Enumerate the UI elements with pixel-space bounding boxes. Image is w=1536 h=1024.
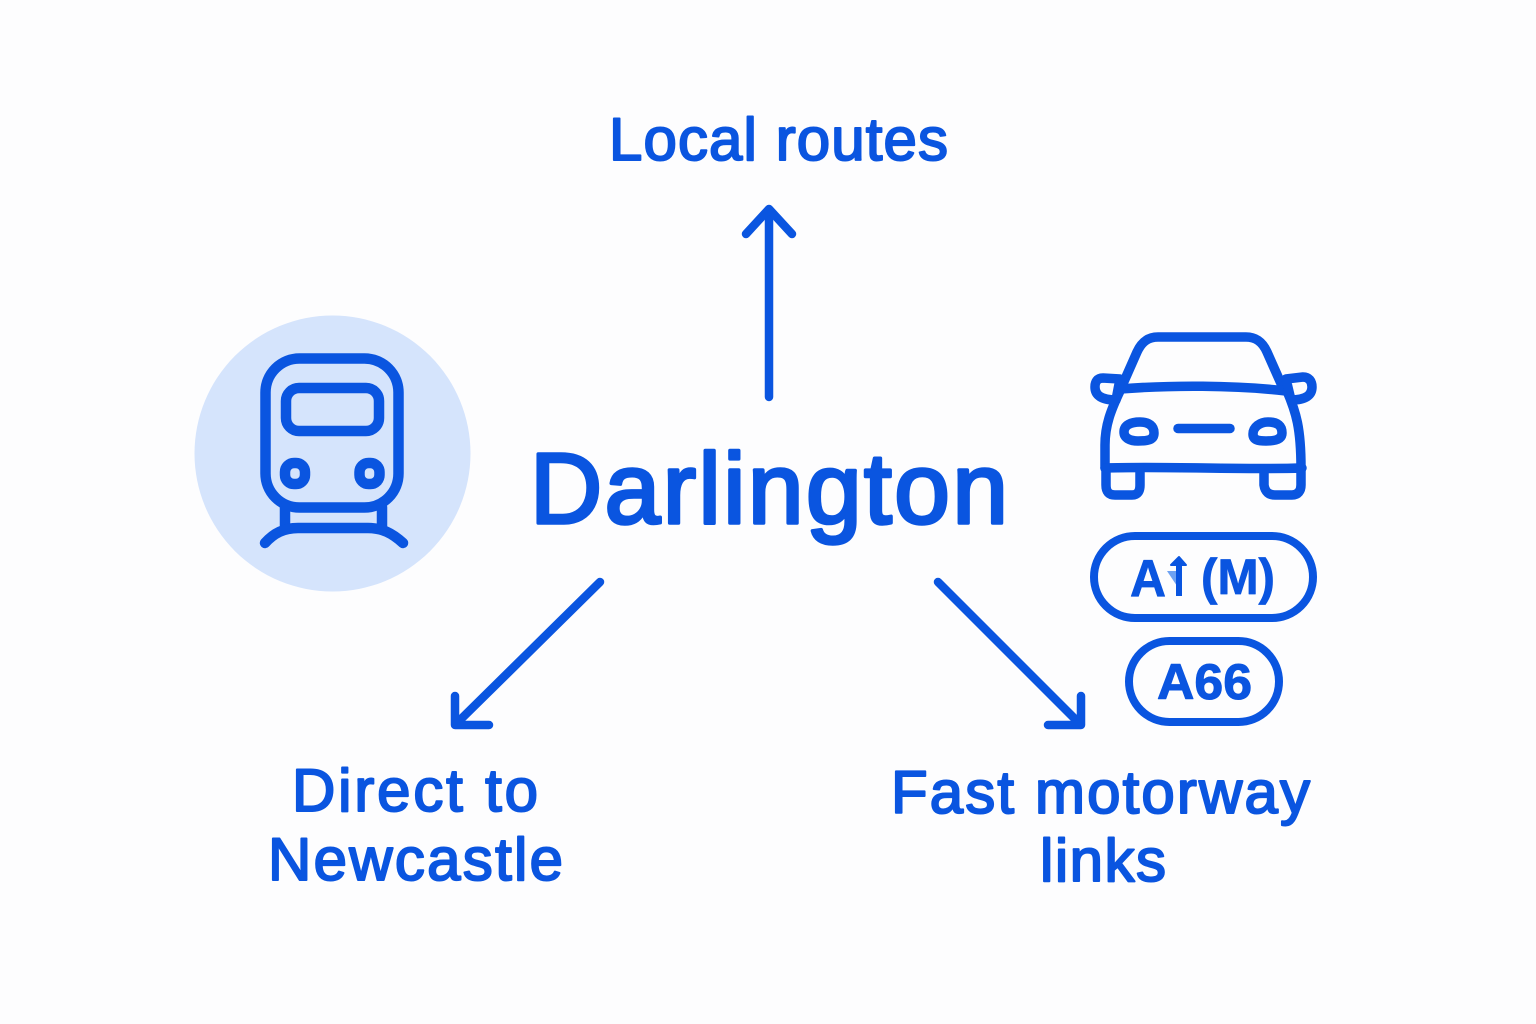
label: Direct to Newcastle: Direct to — [292, 757, 538, 824]
icon: car — [1095, 337, 1312, 495]
arrow: to motorway links — [938, 582, 1081, 725]
icon: train in circle — [194, 316, 470, 592]
label: Fast motorway links — [891, 759, 1310, 894]
label: Direct to Newcastle: Newcastle — [268, 826, 563, 893]
badge: A1(M) — [1094, 536, 1313, 618]
badge: A66: A66 — [1157, 654, 1252, 710]
heading: Local routes: Local routes — [609, 106, 948, 173]
arrow: up to local routes — [746, 209, 792, 397]
title: Darlington: Darlington — [530, 433, 1008, 545]
label: Fast motorway links: Fast motorway — [891, 759, 1310, 826]
badge: A1(M): (M) — [1201, 549, 1275, 605]
label: Fast motorway links: links — [1040, 827, 1166, 894]
label: Direct to Newcastle — [268, 757, 563, 893]
arrow: to Newcastle — [455, 582, 600, 725]
badge: A66 — [1129, 641, 1279, 722]
badge: A1(M): A — [1130, 550, 1166, 608]
